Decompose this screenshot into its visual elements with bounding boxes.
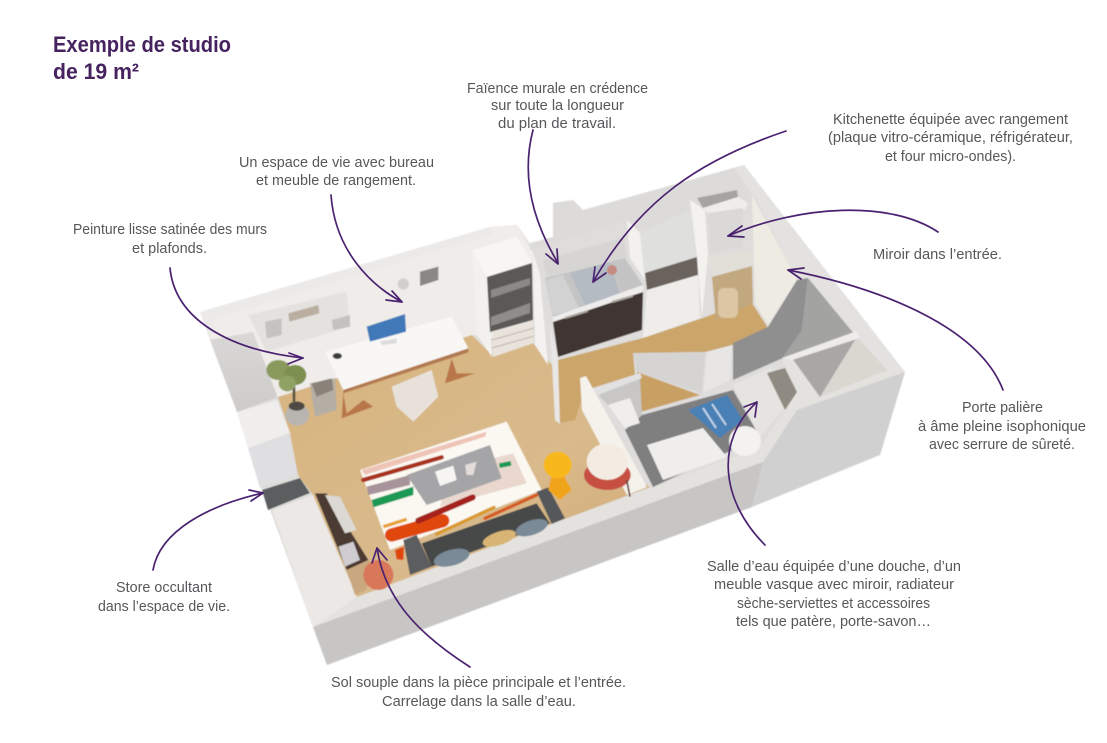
callout: bathroom — [707, 559, 961, 630]
callout: bathroom: tels que patère, porte-savon… — [736, 614, 931, 630]
arrow: front door — [788, 268, 1003, 390]
entrance cabinet and mirror — [690, 190, 753, 320]
storage unit — [472, 237, 548, 365]
computer — [367, 314, 406, 345]
back wall of the living area — [200, 225, 533, 397]
callout: front door: Porte palière — [962, 400, 1043, 416]
vanity — [733, 368, 797, 437]
callout: bathroom: meuble vasque avec miroir, radiateur — [714, 577, 954, 593]
title: Exemple de studio — [53, 32, 231, 57]
callout: kitchenette — [828, 112, 1073, 165]
chair — [392, 370, 438, 422]
callout: paint: et plafonds. — [132, 241, 207, 257]
right wall — [735, 165, 905, 372]
wall posters — [248, 292, 350, 352]
callout: tiles: du plan de travail. — [498, 116, 616, 132]
callout: living space: et meuble de rangement. — [256, 173, 416, 189]
walls — [200, 165, 905, 665]
bath mat — [688, 395, 743, 438]
basket — [310, 378, 337, 417]
shower tray and toilet — [647, 426, 761, 480]
yellow stool — [544, 452, 572, 500]
desk — [325, 317, 475, 418]
callout: blind: Store occultant — [116, 580, 212, 596]
callout: kitchenette: Kitchenette équipée avec rangement — [833, 112, 1068, 128]
callout: front door: à âme pleine isophonique — [918, 419, 1086, 435]
callout: front door: avec serrure de sûreté. — [929, 437, 1075, 453]
callout: front door — [918, 400, 1086, 453]
title: de 19 m² — [53, 59, 139, 84]
callout: floor — [331, 675, 626, 710]
callout: tiles: sur toute la longueur — [491, 98, 624, 114]
items against the wall — [315, 493, 393, 595]
arrow: kitchenette — [593, 131, 786, 282]
callout: living space — [239, 155, 434, 189]
callout: blind: dans l’espace de vie. — [98, 599, 230, 615]
callout: kitchenette: et four micro-ondes). — [885, 149, 1016, 165]
callout: mirror: Miroir dans l’entrée. — [873, 247, 1002, 263]
callout: blind — [98, 580, 230, 615]
callout: paint — [73, 222, 267, 257]
closet — [643, 257, 700, 338]
arrow: tiles — [528, 130, 558, 264]
open door — [550, 325, 560, 424]
callout: floor: Carrelage dans la salle d’eau. — [382, 694, 576, 710]
bathroom walls — [580, 278, 887, 495]
coffee table — [407, 445, 502, 505]
clock — [398, 278, 409, 290]
callout: floor: Sol souple dans la pièce principale et l’entrée. — [331, 675, 626, 691]
front outer faces — [313, 462, 763, 665]
3D floor plan of the studio — [200, 165, 905, 665]
callout: tiles: Faïence murale en crédence — [467, 81, 648, 97]
callout: living space: Un espace de vie avec bureau — [239, 155, 434, 171]
entrance floor — [552, 300, 768, 423]
radiator — [608, 398, 640, 428]
floor lamp — [584, 443, 631, 497]
callout: tiles — [467, 81, 648, 132]
callout: bathroom: Salle d’eau équipée d’une douche, d’un — [707, 559, 961, 575]
left wall faces — [210, 332, 277, 412]
callout: paint: Peinture lisse satinée des murs — [73, 222, 267, 238]
arrow: floor — [372, 548, 470, 667]
callout: bathroom: sèche-serviettes et accessoires — [737, 596, 930, 612]
sofa — [403, 487, 565, 575]
plant — [266, 360, 309, 426]
kitchen wall — [530, 167, 750, 250]
arrow: living space — [331, 195, 402, 302]
arrow: paint — [170, 268, 303, 364]
picture — [420, 267, 438, 286]
arrow: bathroom — [728, 402, 765, 545]
callout: kitchenette: (plaque vitro-céramique, réfrigérateur, — [828, 130, 1073, 146]
kitchen counter and cabinets — [545, 258, 643, 357]
arrow: blind — [153, 490, 263, 570]
title — [53, 32, 231, 84]
living area: desk, plant — [248, 267, 475, 426]
rug, sofa, coffee table — [315, 422, 631, 595]
arrow: mirror — [728, 210, 938, 237]
wood floor — [278, 335, 650, 597]
